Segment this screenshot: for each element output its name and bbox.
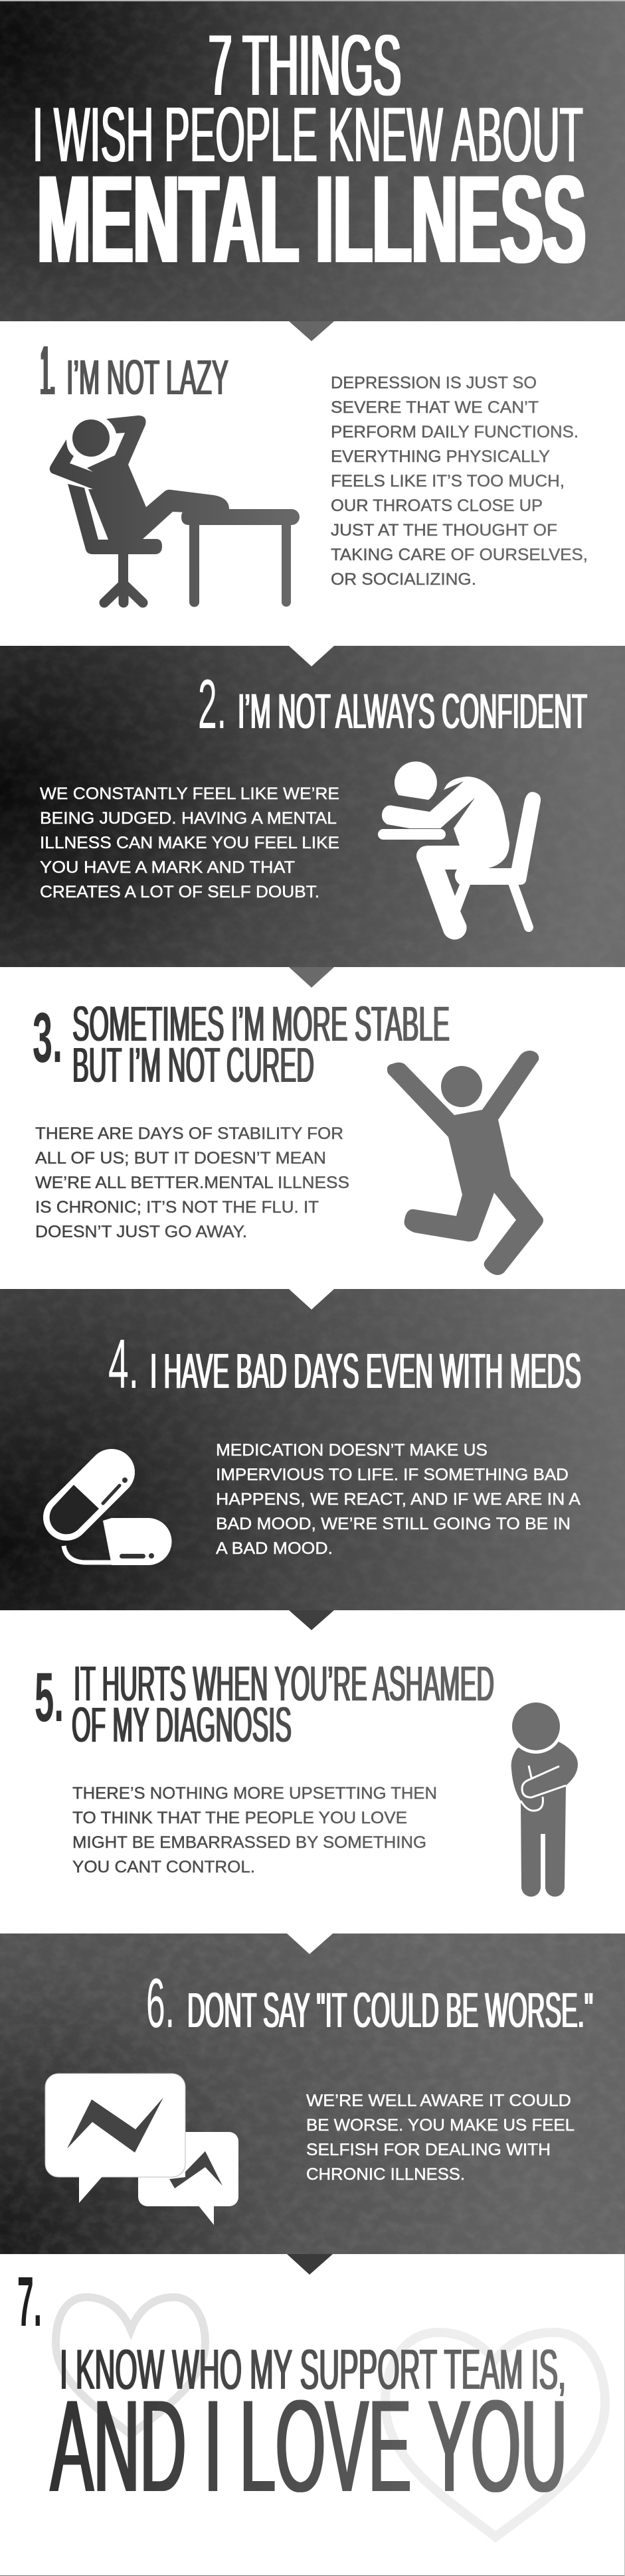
panel: 1 I'm not lazy bbox=[0, 321, 625, 646]
text block 3: THERE ARE DAYS OF STABILITY FOR bbox=[35, 1124, 343, 1143]
heading 1: 1. bbox=[41, 332, 55, 410]
text block 3: WE’RE ALL BETTER.MENTAL ILLNESS bbox=[35, 1174, 349, 1192]
text block 2: WE CONSTANTLY FEEL LIKE WE’RE bbox=[40, 785, 339, 803]
panel: 2 I'm not always confident bbox=[0, 646, 625, 967]
text block 5: THERE’S NOTHING MORE UPSETTING THEN bbox=[72, 1784, 437, 1803]
text block 2: CREATES A LOT OF SELF DOUBT. bbox=[40, 883, 319, 901]
panel: 5 it hurts when you're ashamed bbox=[0, 1610, 625, 1933]
arrow: white pointer bbox=[287, 1933, 333, 1954]
heading 6 bbox=[146, 1965, 593, 2042]
text block 4 bbox=[216, 1441, 580, 1558]
icon: speech bubbles with lightning bbox=[45, 2074, 238, 2225]
text block 5 bbox=[72, 1784, 437, 1876]
text block 6 bbox=[306, 2091, 575, 2184]
text block 1 bbox=[331, 374, 588, 589]
text block 2: YOU HAVE A MARK AND THAT bbox=[40, 858, 295, 877]
arrow: white pointer bbox=[289, 1289, 334, 1310]
text block 6: WE’RE WELL AWARE IT COULD bbox=[306, 2091, 571, 2110]
title: 7 THINGS bbox=[209, 17, 401, 114]
heading 2: 2. bbox=[198, 666, 226, 743]
arrow: white pointer bbox=[289, 646, 334, 666]
panel: 3 sometimes more stable bbox=[0, 967, 625, 1289]
icon: slumped person at desk bbox=[378, 761, 541, 940]
text block 5: TO THINK THAT THE PEOPLE YOU LOVE bbox=[72, 1809, 407, 1827]
arrow: dark pointer bbox=[289, 967, 334, 988]
text block 2: BEING JUDGED. HAVING A MENTAL bbox=[40, 809, 337, 828]
heading 5 bbox=[35, 1656, 494, 1752]
heading 4: 4. bbox=[108, 1326, 139, 1403]
text block 1: JUST AT THE THOUGHT OF bbox=[331, 521, 557, 540]
heading 4 bbox=[108, 1326, 581, 1403]
text block 3: DOESN’T JUST GO AWAY. bbox=[35, 1223, 247, 1241]
panel: 7 support team bbox=[0, 2254, 625, 2576]
text block 2 bbox=[40, 785, 339, 901]
text block 1: EVERYTHING PHYSICALLY bbox=[331, 447, 550, 466]
heading 5: 5. bbox=[35, 1659, 64, 1736]
text block 3: ALL OF US; BUT IT DOESN’T MEAN bbox=[35, 1149, 326, 1168]
icon: reclining person with feet on desk bbox=[50, 416, 300, 607]
text block 6: SELFISH FOR DEALING WITH bbox=[306, 2141, 551, 2159]
icon: outline heart left bbox=[56, 2297, 205, 2435]
arrow: dark pointer bbox=[287, 2254, 333, 2275]
heading 3: 3. bbox=[33, 998, 62, 1077]
icon: pills bbox=[50, 1472, 171, 1565]
text block 1: OR SOCIALIZING. bbox=[331, 570, 476, 589]
icon: ashamed person bbox=[509, 1699, 578, 1897]
text block 1: SEVERE THAT WE CAN’T bbox=[331, 398, 539, 417]
heading 3: BUT I’M NOT CURED bbox=[72, 1037, 314, 1093]
arrow: header pointer bbox=[289, 321, 334, 341]
text block 5: MIGHT BE EMBARRASSED BY SOMETHING bbox=[72, 1833, 426, 1852]
text block 1: PERFORM DAILY FUNCTIONS. bbox=[331, 423, 579, 441]
panel: header bbox=[0, 0, 625, 321]
text block 4: MEDICATION DOESN’T MAKE US bbox=[216, 1441, 488, 1460]
text block 3 bbox=[35, 1124, 349, 1241]
title bbox=[33, 17, 586, 289]
heading 2 bbox=[198, 666, 587, 743]
text block 1: DEPRESSION IS JUST SO bbox=[331, 374, 537, 392]
arrow: dark pointer bbox=[289, 1610, 334, 1630]
text block 4: IMPERVIOUS TO LIFE. IF SOMETHING BAD bbox=[216, 1466, 569, 1484]
text block 4: HAPPENS, WE REACT, AND IF WE ARE IN A bbox=[216, 1490, 580, 1509]
text block 6: BE WORSE. YOU MAKE US FEEL bbox=[306, 2116, 575, 2135]
text block 1: TAKING CARE OF OURSELVES, bbox=[331, 546, 588, 564]
text block 1: OUR THROATS CLOSE UP bbox=[331, 496, 543, 515]
panel: 4 bad days even with meds bbox=[0, 1289, 625, 1610]
text block 4: A BAD MOOD. bbox=[216, 1539, 333, 1558]
text block 1: FEELS LIKE IT’S TOO MUCH, bbox=[331, 472, 565, 491]
text block 3: IS CHRONIC; IT’S NOT THE FLU. IT bbox=[35, 1198, 319, 1217]
text block 5: YOU CANT CONTROL. bbox=[72, 1858, 255, 1876]
icon: jumping person bbox=[387, 1051, 543, 1275]
heading 6: 6. bbox=[146, 1965, 175, 2042]
panel: 7 support team: 7. bbox=[17, 2263, 42, 2341]
heading 1: I’M NOT LAZY bbox=[66, 350, 228, 405]
icon: outline heart right bbox=[385, 2332, 605, 2537]
heading 3 bbox=[33, 996, 450, 1093]
heading 1 bbox=[41, 332, 228, 410]
heading 5: OF MY DIAGNOSIS bbox=[72, 1697, 292, 1752]
text block 2: ILLNESS CAN MAKE YOU FEEL LIKE bbox=[40, 834, 339, 852]
panel: 6 don't say it could be worse bbox=[0, 1933, 625, 2254]
text block 4: BAD MOOD, WE’RE STILL GOING TO BE IN bbox=[216, 1515, 571, 1533]
text block 6: CHRONIC ILLNESS. bbox=[306, 2165, 465, 2184]
